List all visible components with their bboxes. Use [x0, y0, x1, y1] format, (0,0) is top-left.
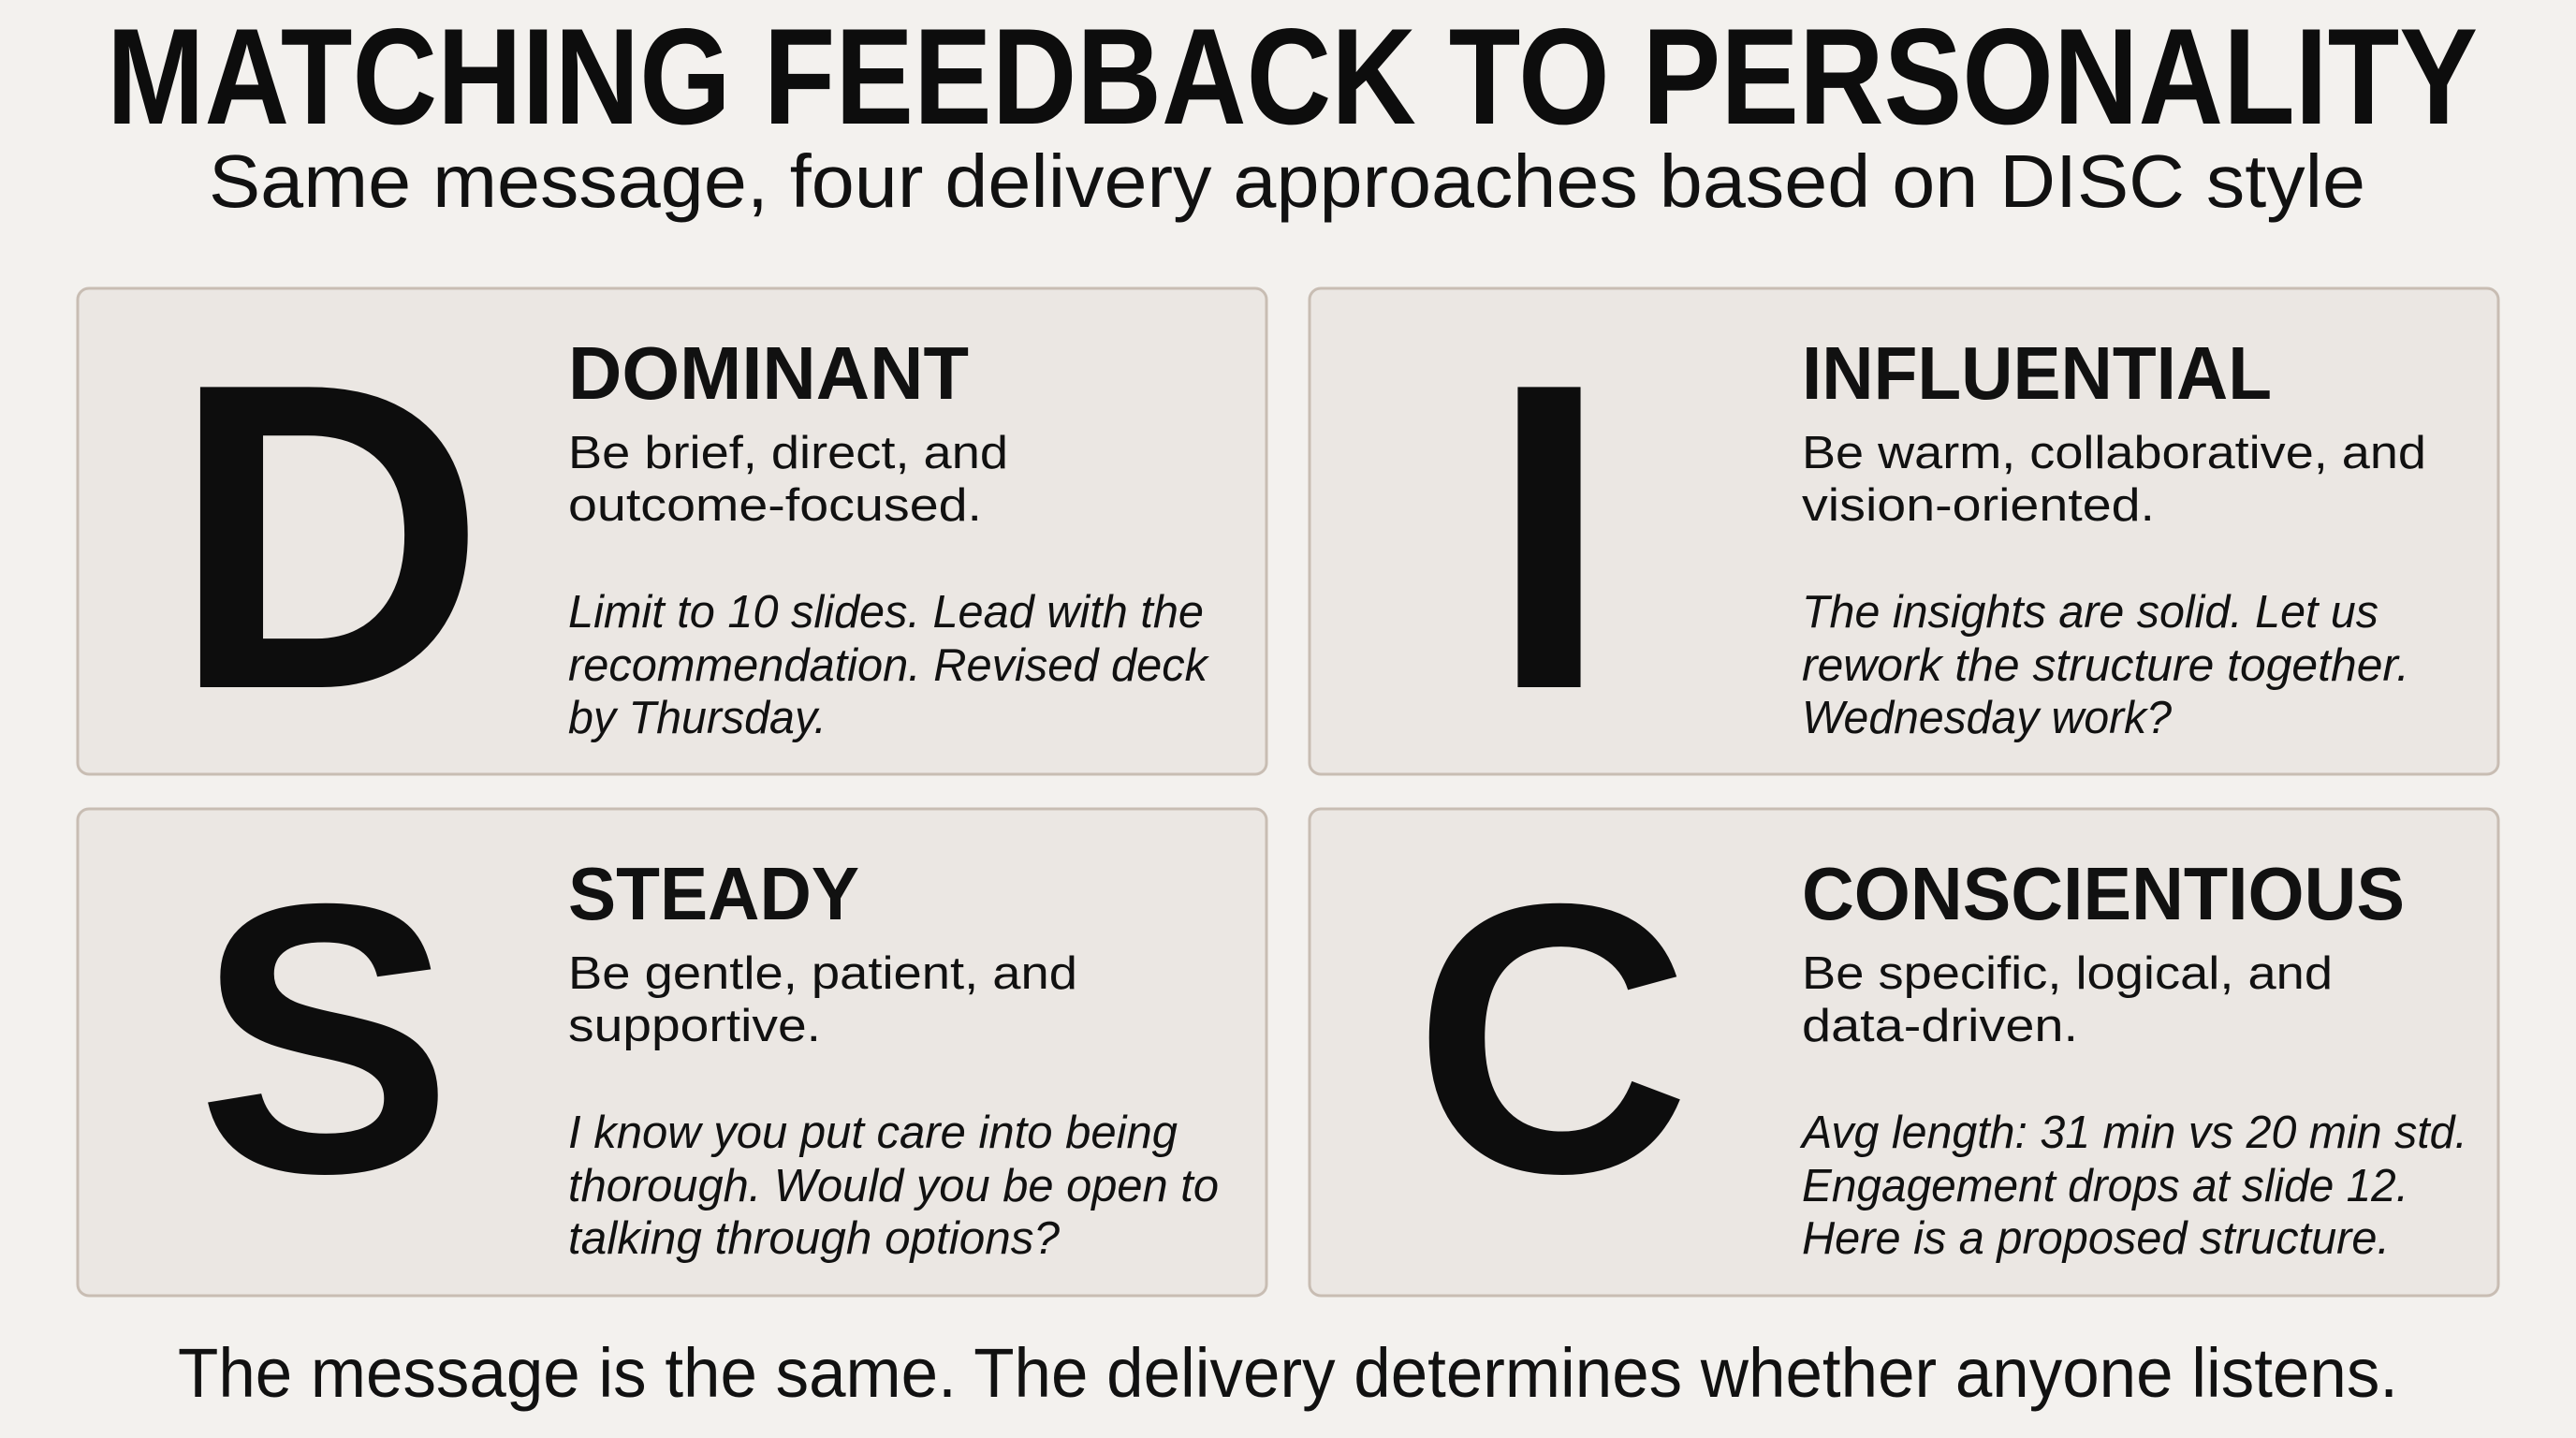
letter D: D	[171, 292, 486, 780]
example message: Avg length: 31 min vs 20 min std.	[1799, 1108, 2467, 1158]
footer statement: The message is the same. The delivery determines whether anyone listens.	[178, 1334, 2398, 1412]
example message: recommendation. Revised deck	[568, 640, 1209, 691]
letter I: I	[1488, 292, 1610, 780]
approach text: Be gentle, patient, and	[568, 948, 1077, 999]
letter C: C	[1413, 824, 1690, 1253]
heading: conscientious: CONSCIENTIOUS	[1802, 852, 2405, 935]
panel: dominant	[78, 288, 1266, 780]
example message: talking through options?	[568, 1213, 1061, 1264]
example message: The insights are solid. Let us	[1802, 587, 2378, 638]
approach text: data-driven.	[1802, 1001, 2078, 1051]
heading: dominant: DOMINANT	[568, 331, 969, 415]
approach text	[1802, 948, 2333, 1051]
approach text	[1802, 428, 2426, 531]
example message	[568, 1108, 1219, 1264]
panel: steady	[78, 809, 1266, 1296]
example message: Limit to 10 slides. Lead with the	[568, 587, 1204, 638]
example message: Engagement drops at slide 12.	[1802, 1161, 2408, 1211]
example message: rework the structure together.	[1802, 640, 2409, 691]
subtitle: Same message, four delivery approaches based on DISC style	[209, 139, 2365, 223]
approach text: vision-oriented.	[1802, 480, 2155, 531]
example message: Wednesday work?	[1802, 693, 2173, 743]
approach text	[568, 428, 1008, 531]
example message	[1799, 1108, 2467, 1264]
example message	[1802, 587, 2409, 743]
example message: thorough. Would you be open to	[568, 1161, 1219, 1211]
approach text: Be warm, collaborative, and	[1802, 428, 2426, 478]
panel: influential	[1310, 288, 2498, 780]
example message: Here is a proposed structure.	[1802, 1213, 2390, 1264]
approach text: outcome-focused.	[568, 480, 982, 531]
example message	[568, 587, 1209, 743]
letter S: S	[197, 824, 453, 1253]
approach text: supportive.	[568, 1001, 821, 1051]
example message: I know you put care into being	[568, 1108, 1178, 1158]
approach text: Be brief, direct, and	[568, 428, 1008, 478]
approach text: Be specific, logical, and	[1802, 948, 2333, 999]
panel: conscientious	[1310, 809, 2498, 1296]
heading: influential: INFLUENTIAL	[1802, 331, 2272, 415]
example message: by Thursday.	[568, 693, 827, 743]
heading: steady: STEADY	[568, 852, 859, 935]
approach text	[568, 948, 1077, 1051]
